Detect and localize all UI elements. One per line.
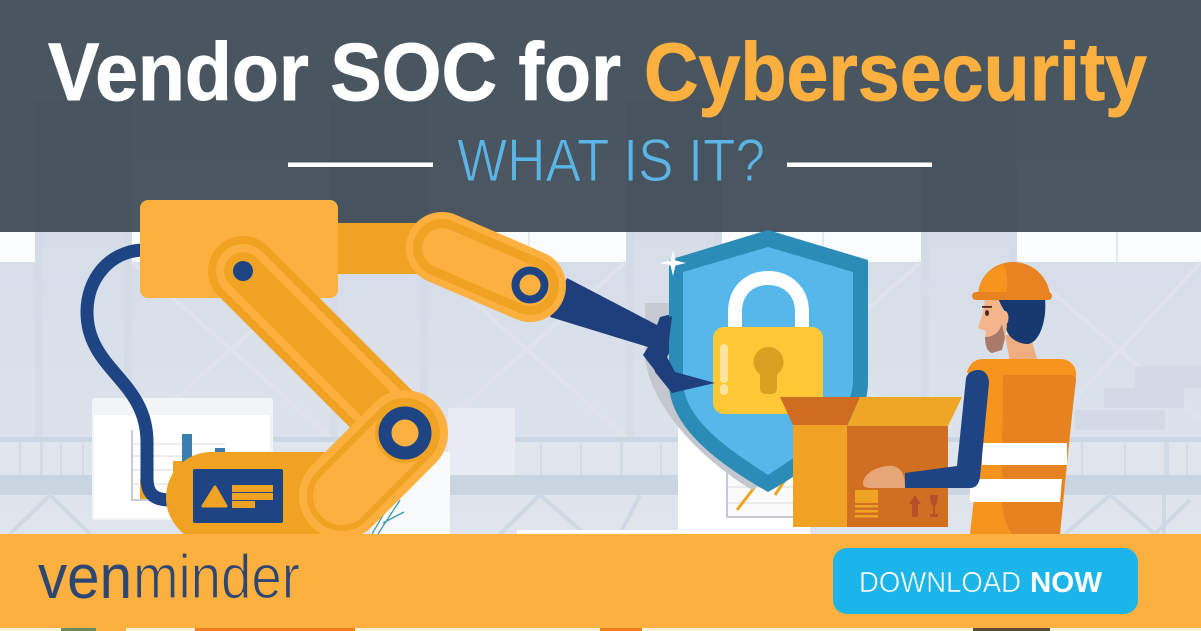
handling icons — [909, 495, 938, 517]
header banner — [0, 0, 1201, 232]
claw arm — [550, 278, 670, 390]
warehouse background — [0, 232, 1201, 534]
worker — [863, 262, 1076, 534]
download button: DOWNLOAD — [859, 567, 1021, 599]
logo: venminder — [38, 543, 300, 612]
background documents — [92, 303, 810, 534]
controller housing — [140, 200, 338, 298]
shipping label — [855, 490, 878, 518]
download button: NOW — [1030, 567, 1103, 599]
hand — [863, 466, 905, 488]
sparkle — [660, 250, 686, 276]
title: Cybersecurity — [644, 27, 1147, 118]
vest stripes — [982, 443, 1067, 465]
subtitle with rules: WHAT IS IT? — [457, 127, 765, 194]
download button — [833, 548, 1138, 614]
elbow capsule — [342, 403, 435, 496]
shield with padlock — [655, 230, 868, 492]
document: bar chart — [92, 398, 273, 520]
logo: venminder: ven — [38, 543, 132, 612]
robot arm — [140, 200, 715, 534]
padlock shackle — [735, 278, 802, 330]
footer band — [0, 534, 1201, 631]
title: Vendor SOC for — [48, 27, 621, 118]
neck — [1005, 335, 1038, 359]
robot base — [166, 452, 326, 534]
base control panel — [193, 469, 283, 523]
face — [978, 298, 1007, 350]
title — [48, 27, 1147, 118]
document: behind shield — [645, 303, 810, 534]
hard hat — [972, 262, 1052, 300]
beard — [985, 324, 1005, 353]
worker arm — [905, 370, 989, 488]
upper arm capsule — [442, 248, 544, 300]
logo: venminder: minder — [133, 543, 300, 612]
shield shadow — [646, 363, 758, 490]
claw tip over lock — [655, 316, 715, 393]
subtitle with rules — [288, 127, 932, 194]
safety vest — [967, 359, 1076, 534]
lower arm — [233, 261, 405, 433]
hair — [997, 298, 1045, 344]
robot cable — [87, 250, 170, 500]
padlock body — [713, 327, 823, 414]
cardboard box — [780, 397, 962, 527]
shield — [669, 230, 868, 492]
connector — [338, 223, 417, 274]
document: line chart — [370, 408, 682, 534]
